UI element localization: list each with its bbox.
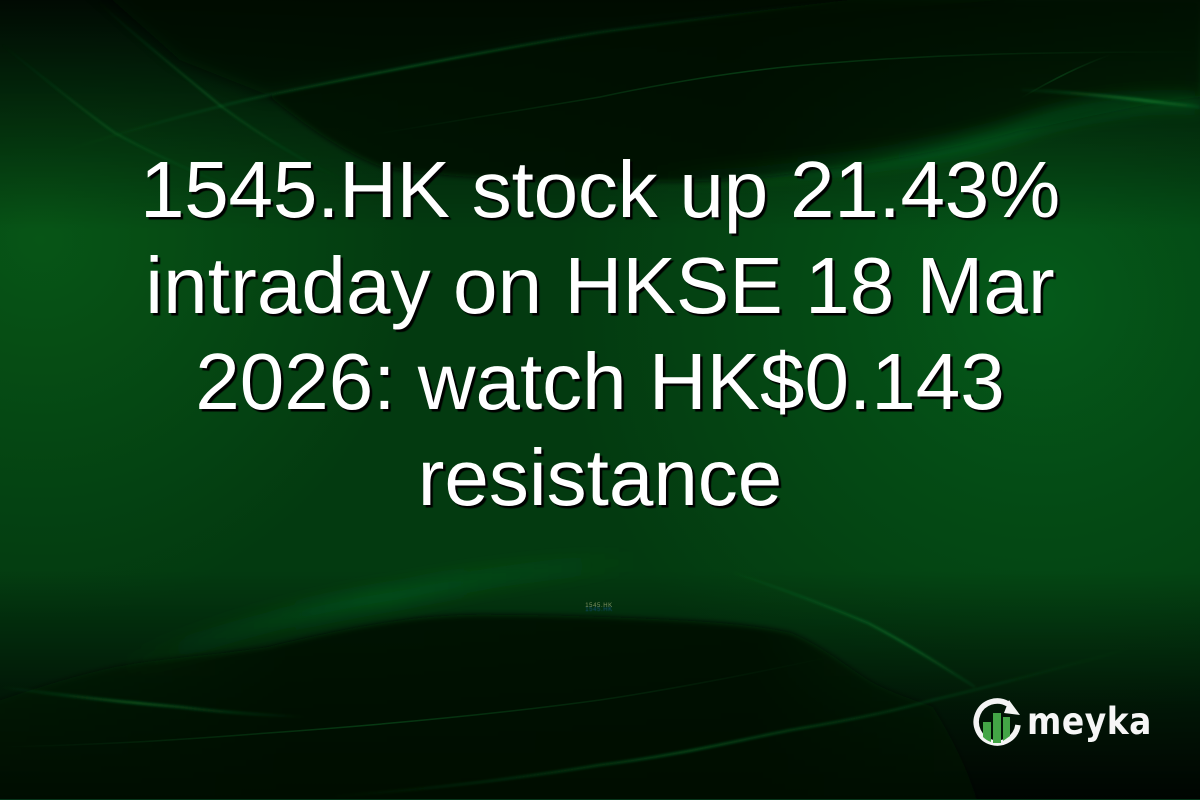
logo: meyka	[973, 698, 1152, 746]
title: intraday on HKSE 18 Mar	[145, 241, 1055, 330]
title	[140, 145, 1060, 522]
tiny caption: 1545.HK	[585, 603, 613, 609]
title: 2026: watch HK$0.143	[195, 337, 1005, 426]
icon: circular arrow with bars	[973, 698, 1021, 746]
wordmark: meyka	[1027, 700, 1152, 743]
title: 1545.HK stock up 21.43%	[140, 145, 1060, 234]
title: resistance	[418, 433, 782, 522]
